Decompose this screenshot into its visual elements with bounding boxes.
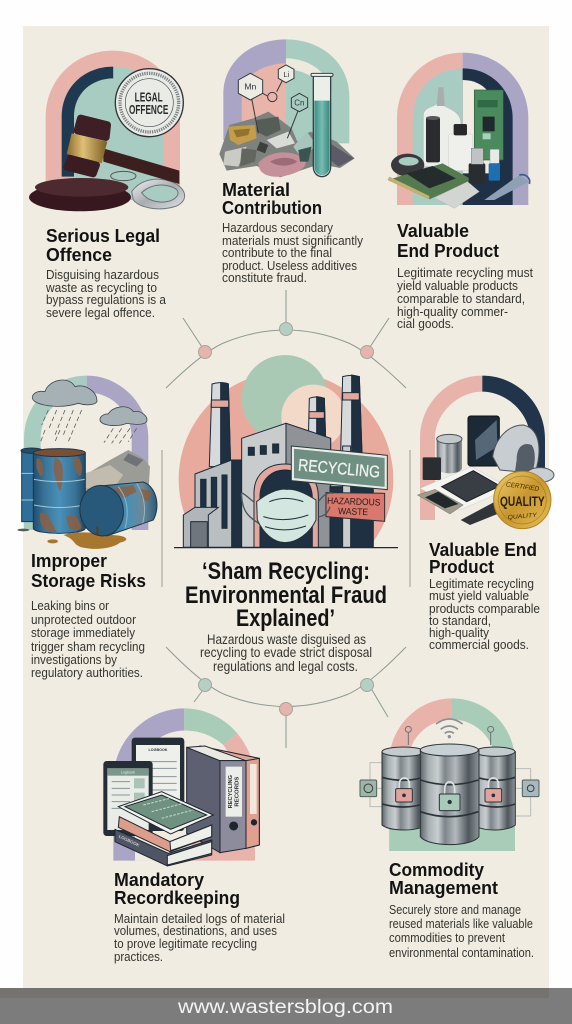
- text: valuable end product right: high-quality: [429, 625, 489, 640]
- recycling sign: RECYCLING: [297, 455, 381, 482]
- text: material contribution: constitute fraud.: [222, 270, 307, 285]
- quality badge: [494, 471, 551, 529]
- icon: minerals and test tube: [219, 39, 355, 177]
- wifi: [436, 719, 463, 738]
- book stack: [115, 792, 213, 866]
- icon: quality electronics: [417, 376, 554, 529]
- hazardous waste sign: WASTE: [338, 506, 368, 517]
- icon: legal offence stamp: LEGAL: [135, 90, 163, 104]
- heading: material contribution: Contribution: [222, 198, 322, 218]
- storm clouds: [32, 380, 147, 426]
- network connector: bottom arc: [166, 647, 406, 748]
- heading: serious legal offence: Serious Legal: [46, 226, 160, 246]
- text: valuable end product right: Legitimate recycling: [429, 576, 534, 591]
- text: mandatory recordkeeping: Maintain detailed logs of material: [114, 911, 285, 926]
- heading: commodity management: [389, 860, 498, 898]
- footer bar: [0, 988, 572, 1024]
- title: [185, 558, 387, 632]
- quality badge: CERTIFIED: [506, 481, 540, 493]
- heading: mandatory recordkeeping: [114, 870, 240, 908]
- text: serious legal offence: severe legal offence.: [46, 305, 155, 320]
- heading: improper storage risks: Storage Risks: [31, 571, 146, 591]
- rocks pile: [85, 450, 150, 493]
- text: serious legal offence: Disguising hazardous: [46, 267, 159, 282]
- text: commodity management: reused materials like valuable: [389, 916, 533, 931]
- text: serious legal offence: bypass regulations is a: [46, 292, 167, 307]
- text: improper storage risks: storage immediately: [31, 625, 135, 640]
- icon: handcuffs: [111, 171, 185, 209]
- heading: material contribution: [222, 180, 322, 218]
- hazardous waste sign: [326, 493, 385, 521]
- quality badge: QUALITY: [507, 513, 538, 521]
- ground line: [174, 546, 398, 550]
- text: valuable end product right: products comparable: [429, 601, 540, 616]
- molecule hexagons: Cn: [294, 98, 304, 107]
- heading: commodity management: Management: [389, 878, 498, 898]
- icon: leaking barrels in the rain: [17, 376, 157, 549]
- molecule hexagons: Mn: [244, 82, 257, 92]
- text: material contribution: product. Useless additives: [222, 258, 357, 273]
- subtitle: Hazardous waste disguised as: [207, 631, 366, 647]
- tablets: Logbook: [121, 770, 135, 774]
- title: Explained’: [236, 605, 335, 632]
- heading: valuable end product right: [429, 540, 537, 577]
- icon: central factory with mask: [174, 355, 398, 548]
- subtitle: regulations and legal costs.: [213, 658, 358, 674]
- text: commodity management: environmental contamination.: [389, 945, 534, 960]
- text: improper storage risks: investigations by: [31, 652, 117, 667]
- hazardous waste sign: HAZARDOUS: [327, 496, 381, 508]
- text: valuable end product top: comparable to standard,: [397, 291, 525, 306]
- text: valuable end product right: [429, 576, 540, 652]
- test tube: [311, 73, 333, 177]
- padlocks: [396, 778, 502, 811]
- text: mandatory recordkeeping: [114, 911, 285, 964]
- heading: serious legal offence: Offence: [46, 245, 112, 265]
- text: valuable end product top: cial goods.: [397, 316, 454, 331]
- subtitle: [200, 631, 372, 674]
- text: material contribution: [222, 220, 363, 285]
- electronics: [417, 416, 554, 525]
- title: ‘Sham Recycling:: [202, 558, 370, 585]
- text: valuable end product right: must yield valuable: [429, 588, 529, 603]
- text: commodity management: commodities to prevent: [389, 930, 505, 945]
- products: [388, 87, 530, 208]
- icon: secured storage drums: [360, 698, 539, 851]
- text: valuable end product top: yield valuable products: [397, 278, 518, 293]
- face mask: [241, 489, 333, 543]
- icon: logbooks and binders: [103, 708, 259, 866]
- rocks: [219, 112, 355, 177]
- footer bar: www.wastersblog.com: [177, 997, 393, 1018]
- icon: legal offence stamp: OFFENCE: [129, 103, 168, 117]
- text: material contribution: Hazardous secondary: [222, 220, 333, 235]
- binders: RECORDS: [235, 776, 241, 807]
- book stack: LOGBOOK: [118, 834, 141, 848]
- heading: material contribution: Material: [222, 180, 290, 200]
- network connector: top arc: [166, 290, 406, 388]
- icon: legal offence stamp: [115, 69, 183, 137]
- text: improper storage risks: Leaking bins or: [31, 598, 110, 613]
- text: serious legal offence: waste as recycling to: [45, 280, 157, 295]
- text: material contribution: contribute to the final: [222, 245, 332, 260]
- heading: improper storage risks: [31, 551, 146, 591]
- text: material contribution: materials must significantly: [222, 233, 363, 248]
- rain: [41, 410, 137, 443]
- tablets: LOGBOOK: [149, 748, 168, 752]
- molecule hexagons: [238, 65, 308, 138]
- quality badge: QUALITY: [500, 493, 545, 509]
- factory chimneys: [209, 375, 362, 467]
- subtitle: recycling to evade strict disposal: [200, 644, 372, 660]
- barrels: [21, 448, 157, 539]
- binders: [187, 746, 259, 853]
- tablets: [103, 738, 184, 836]
- text: valuable end product top: Legitimate recycling must: [397, 265, 533, 280]
- text: improper storage risks: unprotected outdoor: [31, 612, 137, 627]
- text: valuable end product right: commercial goods.: [429, 637, 529, 652]
- text: valuable end product top: high-quality commer-: [397, 304, 508, 319]
- heading: valuable end product right: Product: [429, 557, 494, 577]
- heading: commodity management: Commodity: [389, 860, 484, 880]
- icon: gavel and legal offence stamp: [29, 51, 185, 211]
- heading: valuable end product top: End Product: [397, 241, 499, 261]
- icon: recycled electronic products: [388, 53, 530, 208]
- factory buildings: [183, 423, 373, 547]
- text: improper storage risks: trigger sham recycling: [31, 639, 145, 654]
- text: commodity management: Securely store and manage: [389, 902, 521, 917]
- heading: improper storage risks: Improper: [31, 551, 107, 571]
- text: valuable end product right: to standard,: [429, 613, 491, 628]
- icon: gavel: [29, 118, 179, 211]
- binders: RECYCLING: [228, 774, 234, 808]
- recycling sign: [291, 446, 387, 490]
- text: serious legal offence: [45, 267, 167, 320]
- title: Environmental Fraud: [185, 582, 387, 609]
- heading: mandatory recordkeeping: Mandatory: [114, 870, 204, 890]
- text: mandatory recordkeeping: practices.: [114, 949, 163, 964]
- heading: serious legal offence: [46, 226, 160, 265]
- text: mandatory recordkeeping: to prove legitimate recycling: [114, 936, 257, 951]
- text: commodity management: [389, 902, 534, 960]
- heading: valuable end product top: [397, 221, 499, 261]
- sensors: [360, 726, 539, 816]
- text: valuable end product top: [397, 265, 533, 331]
- heading: mandatory recordkeeping: Recordkeeping: [114, 888, 240, 908]
- barrels: [382, 744, 515, 845]
- center panel side rules: [162, 450, 410, 587]
- heading: valuable end product top: Valuable: [397, 221, 469, 241]
- heading: valuable end product right: Valuable End: [429, 540, 537, 560]
- text: improper storage risks: regulatory authorities.: [31, 665, 143, 680]
- text: mandatory recordkeeping: volumes, destinations, and uses: [114, 923, 277, 938]
- oil spill: [17, 529, 126, 549]
- molecule hexagons: Li: [283, 70, 290, 79]
- text: improper storage risks: [31, 598, 145, 680]
